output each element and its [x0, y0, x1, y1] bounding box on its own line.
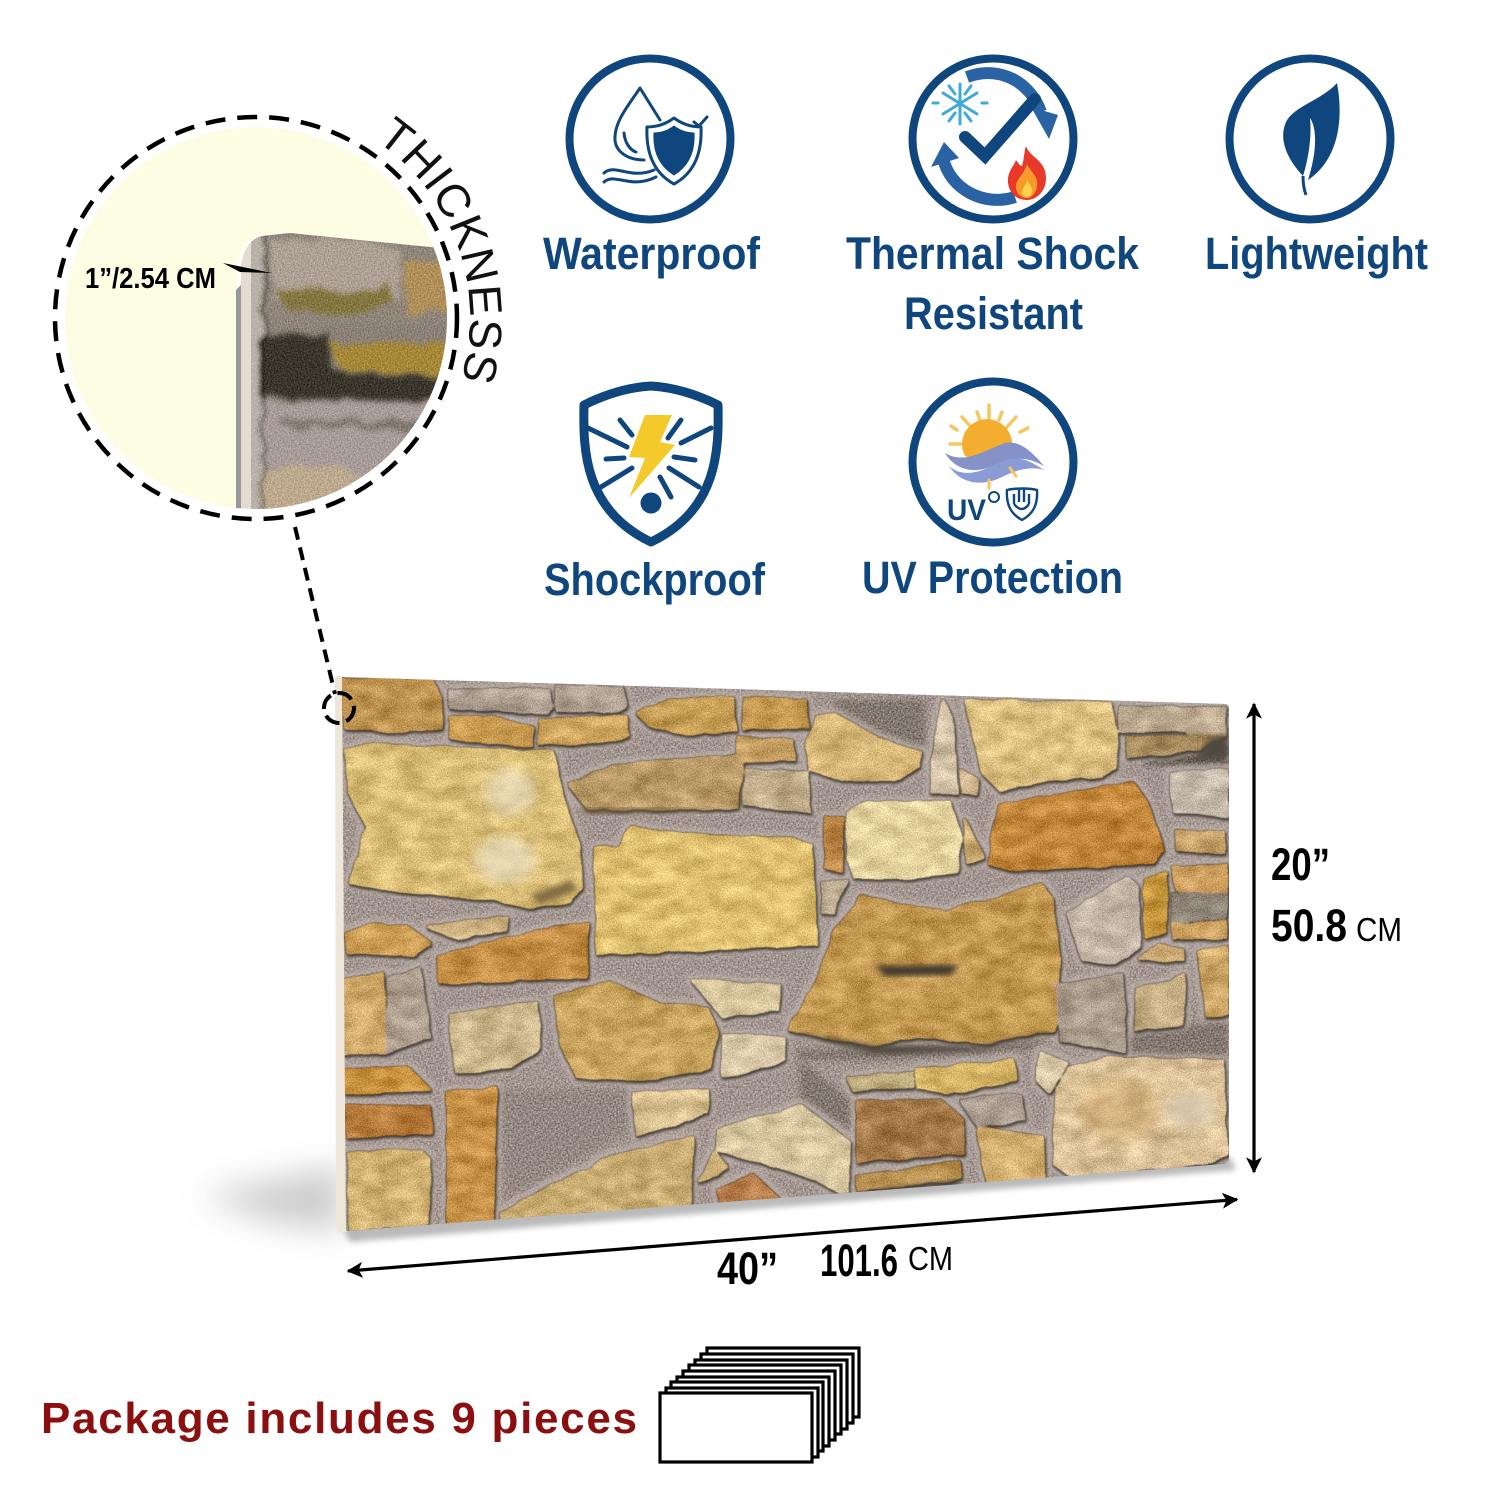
icon: leaf	[1230, 58, 1390, 220]
icon: sun, waves and uv hand	[912, 382, 1074, 542]
dashed ring	[55, 117, 457, 519]
feature: uv protection	[862, 382, 1123, 603]
height dimension arrow	[1252, 704, 1256, 1172]
label: Thermal Shock	[846, 228, 1140, 279]
width label: 101.6	[820, 1235, 898, 1286]
feature: waterproof	[543, 58, 761, 279]
height label: 50.8	[1271, 900, 1347, 951]
stone shapes	[340, 679, 1228, 1230]
width label: CM	[908, 1240, 953, 1277]
feature: shockproof	[544, 386, 766, 605]
stone wall panel	[330, 670, 1235, 1240]
curved thickness label	[376, 140, 470, 388]
icon: thermal shock	[912, 58, 1074, 220]
width dimension arrow	[348, 1200, 1237, 1271]
panel drop shadow	[200, 1157, 1236, 1242]
feature: thermal shock resistant	[846, 58, 1140, 339]
label: Lightweight	[1205, 228, 1428, 279]
label: Resistant	[904, 288, 1083, 339]
width label: 40”	[717, 1243, 778, 1294]
thickness inset magnifier: THICKNESS	[385, 116, 502, 382]
label: UV Protection	[862, 552, 1123, 603]
label: Shockproof	[544, 554, 766, 605]
height label: 20”	[1271, 839, 1330, 890]
height label: CM	[1356, 911, 1402, 948]
icon: shield with lightning	[584, 386, 718, 542]
panel cream edge	[335, 676, 347, 1232]
label: Waterproof	[543, 228, 761, 279]
height label	[1271, 839, 1402, 951]
icon: stack of nine panels	[660, 1348, 859, 1462]
icon: sun, waves and uv hand: UV	[947, 494, 986, 527]
thickness pointer	[223, 263, 272, 273]
inset background	[65, 127, 447, 509]
label	[846, 228, 1140, 339]
thickness inset magnifier	[52, 114, 502, 522]
width label	[717, 1235, 953, 1294]
package text: Package includes 9 pieces	[41, 1394, 637, 1443]
inset panel edge photo	[236, 233, 447, 509]
mortar background	[330, 670, 1235, 1240]
stone tonal details	[475, 735, 1228, 1198]
feature: lightweight	[1205, 58, 1428, 279]
thickness value: 1”/2.54 CM	[85, 263, 216, 295]
dashed connector to panel corner	[295, 527, 354, 723]
icon: waterproof	[570, 58, 730, 220]
